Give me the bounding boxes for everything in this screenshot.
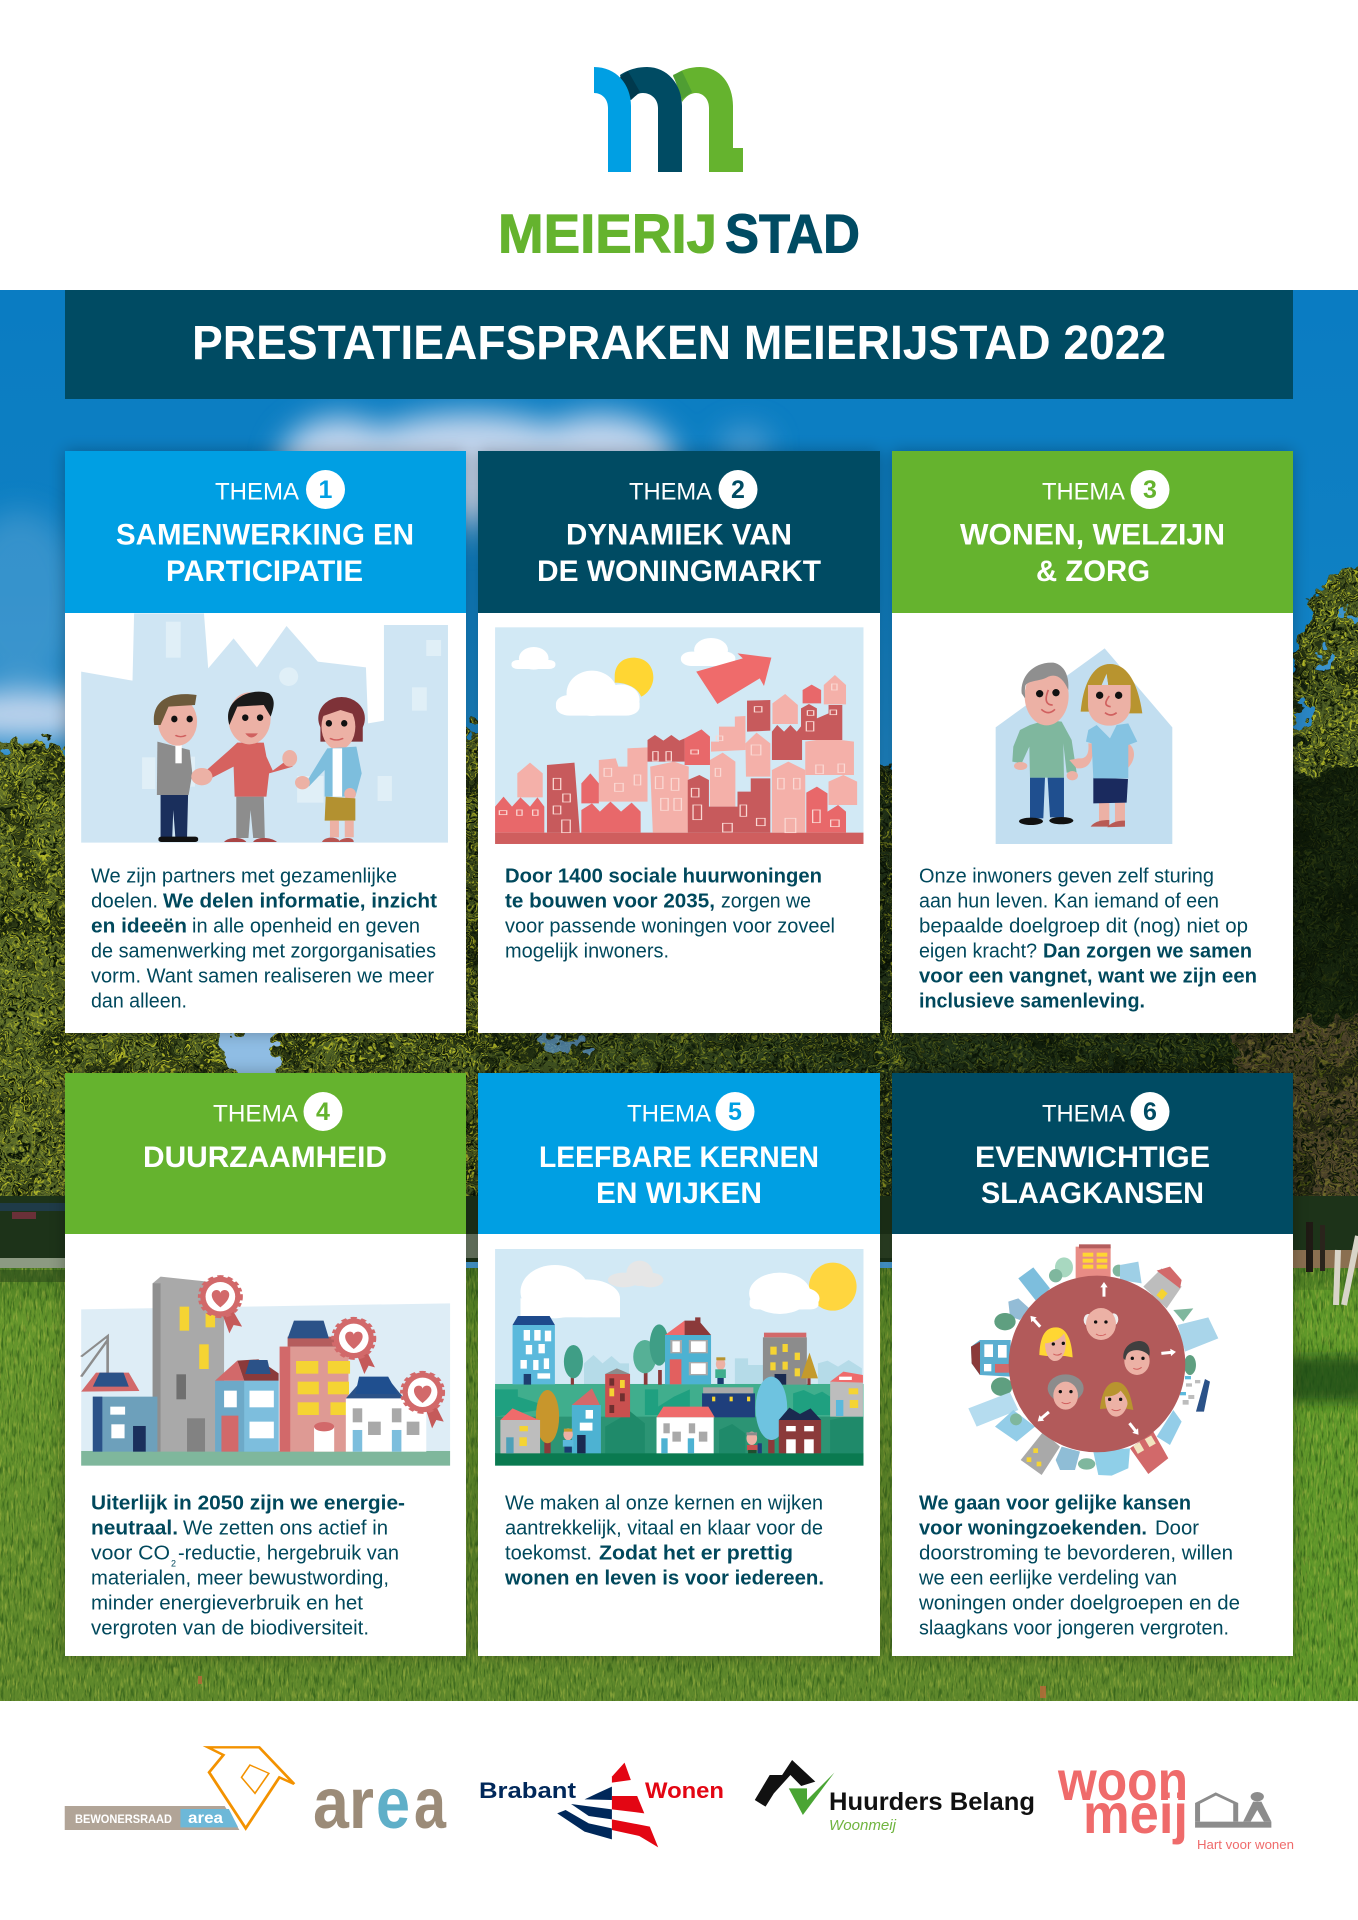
header: thema 2: THEMA	[629, 478, 712, 506]
body text: te bouwen voor 2035,	[505, 890, 715, 912]
body text: toekomst.	[505, 1542, 592, 1564]
logo: Bewonersraad Area: BEWONERSRAAD	[75, 1812, 172, 1826]
wordmark	[498, 202, 860, 264]
body text: Door 1400 sociale huurwoningen	[505, 866, 822, 888]
header: thema 5: 5	[728, 1098, 742, 1126]
body text: Zodat het er prettig	[599, 1542, 793, 1564]
header: thema 2: DE WONINGMARKT	[537, 555, 821, 588]
body text: in alle openheid en geven	[192, 916, 420, 938]
illustration: sustainable houses with solar panels	[81, 1277, 450, 1466]
body text: We delen informatie, inzicht	[163, 890, 437, 912]
body text: minder energieverbruik en het	[91, 1592, 363, 1614]
logo: Woonmeij: meij	[1083, 1782, 1188, 1845]
header: thema 1: 1	[319, 476, 333, 504]
title band	[65, 290, 1293, 399]
wordmark: MEIERIJ	[498, 202, 717, 264]
body text: doorstroming te bevorderen, willen	[919, 1542, 1233, 1564]
body text: wonen en leven is voor iedereen.	[504, 1568, 824, 1590]
logo: area	[313, 1764, 447, 1844]
panel: thema 6 evenwichtige slaagkansen	[892, 1073, 1293, 1656]
body text: slaagkans voor jongeren vergroten.	[919, 1618, 1229, 1640]
logo: Woonmeij: Hart voor wonen	[1197, 1837, 1294, 1852]
header: thema 4: DUURZAAMHEID	[143, 1141, 387, 1174]
body text: We zijn partners met gezamenlijke	[91, 866, 397, 888]
logo: BrabantWonen: Brabant	[479, 1778, 577, 1803]
logo: Bewonersraad Area: area	[188, 1810, 223, 1827]
header: thema 6	[892, 1073, 1293, 1234]
body text	[918, 1492, 1240, 1640]
logo: area: a	[414, 1764, 447, 1844]
illustration: growing city with arrow	[495, 627, 863, 844]
header: thema 5: LEEFBARE KERNEN	[539, 1141, 819, 1174]
header: thema 3: THEMA	[1042, 478, 1125, 506]
face: grey-haired woman	[1048, 1374, 1084, 1410]
illustration: planet with people and houses	[968, 1244, 1218, 1476]
logo: BrabantWonen	[479, 1763, 724, 1847]
header: thema 3	[892, 451, 1293, 613]
face: woman with ochre hair	[1100, 1382, 1133, 1417]
card shadows	[65, 451, 1293, 1656]
header: thema 4	[65, 1073, 466, 1234]
body text: inclusieve samenleving.	[919, 990, 1145, 1012]
body text: vergroten van de biodiversiteit.	[91, 1618, 369, 1640]
header: thema 6: THEMA	[1042, 1100, 1125, 1128]
body text: dan alleen.	[91, 990, 187, 1012]
header: thema 5	[478, 1073, 880, 1234]
body text: Dan zorgen we samen	[1043, 940, 1252, 962]
title band: PRESTATIEAFSPRAKEN MEIERIJSTAD 2022	[192, 317, 1166, 370]
logo: Bewonersraad Area	[65, 1747, 294, 1830]
body text: neutraal.	[91, 1518, 178, 1540]
body text: -reductie, hergebruik van	[178, 1542, 399, 1564]
body text: vorm. Want samen realiseren we meer	[91, 966, 434, 988]
body text	[91, 1492, 405, 1640]
body text: eigen kracht?	[919, 940, 1037, 962]
header: thema 2: 2	[731, 476, 745, 504]
person	[563, 1428, 573, 1453]
panel: thema 2 dynamiek van de woningmarkt	[478, 451, 880, 1033]
header: thema 4: THEMA	[213, 1100, 298, 1128]
body text: doelen.	[91, 890, 158, 912]
illustration: elderly couple in house	[996, 648, 1172, 844]
icon: rosette badge	[402, 1372, 444, 1428]
icon: Meierijstad M mark	[594, 67, 743, 172]
body text: de samenwerking met zorgorganisaties	[91, 940, 436, 962]
header: thema 3: & ZORG	[1036, 555, 1150, 588]
header: thema 3: WONEN, WELZIJN	[960, 518, 1225, 552]
logo: Huurders Belang Woonmeij: Woonmeij	[829, 1817, 897, 1834]
body text: en ideeën	[91, 916, 187, 938]
header: thema 1	[65, 451, 466, 613]
header: thema 2: DYNAMIEK VAN	[566, 518, 792, 552]
body text: we een eerlijke verdeling van	[918, 1568, 1177, 1590]
body text: mogelijk inwoners.	[505, 940, 669, 962]
icon: rosette badge	[334, 1318, 375, 1374]
header: thema 1: SAMENWERKING EN	[116, 518, 414, 552]
icon: rosette badge	[200, 1277, 242, 1333]
body text: We gaan voor gelijke kansen	[919, 1492, 1191, 1514]
logo: Huurders Belang Woonmeij: Huurders Belang	[829, 1788, 1035, 1816]
panel: thema 3 wonen, welzijn en zorg	[892, 451, 1293, 1033]
header: thema 5: EN WIJKEN	[596, 1177, 762, 1210]
logo: Woonmeij	[1057, 1749, 1294, 1852]
body text: Uiterlijk in 2050 zijn we energie-	[91, 1492, 405, 1514]
person	[715, 1357, 726, 1384]
top logo: Meierijstad	[498, 67, 860, 264]
body text	[505, 866, 835, 962]
body text: Door	[1155, 1518, 1199, 1540]
face: old man	[1084, 1308, 1118, 1340]
header: thema 6: 6	[1143, 1098, 1157, 1126]
arrows pointing outward	[1028, 1282, 1176, 1437]
header: thema 1: THEMA	[215, 478, 299, 506]
person	[747, 1432, 762, 1453]
illustration: three people shaking hands	[81, 613, 448, 843]
footer: partner logos	[0, 1701, 1358, 1920]
body text: voor passende woningen voor zoveel	[505, 916, 835, 938]
header: thema 3: 3	[1143, 476, 1157, 504]
body text	[504, 1492, 824, 1590]
body text	[91, 866, 437, 1012]
header: thema 1: PARTICIPATIE	[166, 555, 363, 588]
logo: Woonmeij: woon	[1057, 1749, 1188, 1812]
body text: aan hun leven. Kan iemand of een	[919, 890, 1219, 912]
header: thema 2	[478, 451, 880, 613]
body text: bepaalde doelgroep dit (nog) niet op	[919, 916, 1248, 938]
header: thema 5: THEMA	[627, 1100, 711, 1128]
body text: voor een vangnet, want we zijn een	[919, 966, 1257, 988]
logo: area: e	[376, 1764, 410, 1844]
body text	[919, 866, 1257, 1012]
background photo: sky, trees and grass	[0, 290, 1358, 1701]
logo: Huurders Belang Woonmeij	[755, 1760, 1035, 1834]
body text: 2	[171, 1558, 176, 1568]
body text: voor woningzoekenden.	[919, 1518, 1147, 1540]
header: thema 4: 4	[316, 1098, 330, 1126]
header: thema 6: EVENWICHTIGE	[975, 1141, 1210, 1174]
panel: thema 5 leefbare kernen en wijken	[478, 1073, 880, 1656]
header: thema 6: SLAAGKANSEN	[981, 1177, 1204, 1210]
body text: voor CO	[91, 1542, 170, 1564]
body text: aantrekkelijk, vitaal en klaar voor de	[505, 1518, 823, 1540]
body text: materialen, meer bewustwording,	[91, 1568, 389, 1590]
body text: Onze inwoners geven zelf sturing	[919, 866, 1214, 888]
illustration: liveable neighbourhood	[495, 1249, 863, 1466]
body text: zorgen we	[721, 890, 811, 912]
logo: BrabantWonen: Wonen	[645, 1778, 724, 1803]
face: dark-haired man	[1123, 1341, 1150, 1375]
face: blonde woman	[1039, 1327, 1073, 1361]
logo: area: ar	[313, 1764, 374, 1844]
body text: woningen onder doelgroepen en de	[918, 1592, 1240, 1614]
body text: We maken al onze kernen en wijken	[505, 1492, 823, 1514]
panel: thema 1 samenwerking en participatie	[65, 451, 466, 1033]
panel: thema 4 duurzaamheid	[65, 1073, 466, 1656]
wordmark: STAD	[725, 202, 860, 264]
body text: We zetten ons actief in	[183, 1518, 388, 1540]
